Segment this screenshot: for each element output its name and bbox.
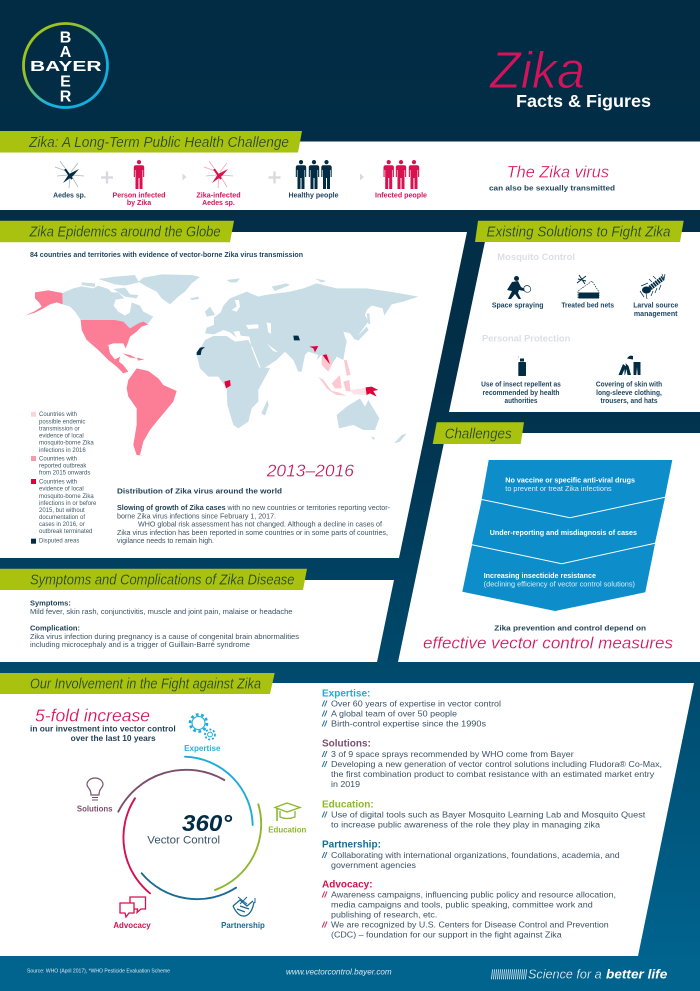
label: Aedes sp.: Aedes sp. <box>53 192 86 200</box>
challenge: insecticide resistance <box>462 544 655 611</box>
heading: challenges: Challenges <box>445 426 512 442</box>
label: person infected by Zika: by Zika <box>127 200 151 207</box>
title: Zika <box>488 42 585 100</box>
icon: Zika-infected mosquito <box>204 161 233 188</box>
label: insect repellent: recommended by health <box>482 390 560 397</box>
callout: 5-fold increase: 5-fold increase <box>35 706 150 726</box>
heading: symptoms <box>0 569 307 590</box>
chart: 360 degree ring <box>118 757 261 899</box>
logo: Bayer cross <box>24 24 108 108</box>
distribution text block: Zika virus infection has been reported in some countries or in some parts of countries, <box>117 528 388 537</box>
map legend: mosquito-borne Zika <box>39 440 94 446</box>
complication text: including microcephaly and is a trigger of Guillain-Barré syndrome <box>30 640 250 649</box>
list: advocacy: media campaigns and tools, public speaking, committee work and <box>331 899 593 909</box>
label: infected people: Infected people <box>375 192 427 200</box>
slogan stripes <box>492 969 526 979</box>
callout: 5-fold increase: over the last 10 years <box>71 734 156 743</box>
heading: public health challenge <box>0 131 302 152</box>
icon: treated bed nets <box>577 275 599 298</box>
callout: 5-fold increase: in our investment into vector control <box>30 724 176 733</box>
list: solutions: // <box>321 759 328 769</box>
label: larval source management: Larval source <box>633 303 678 310</box>
list: advocacy: publishing of research, etc. <box>331 909 437 919</box>
distribution text block: Slowing of growth of Zika cases with no new countries or territories reporting vector- <box>117 503 390 512</box>
map legend: Countries with <box>39 456 77 462</box>
conclusion: effective vector control measures <box>423 633 673 652</box>
heading: existing solutions: Existing Solutions to Fight Zika <box>486 224 670 240</box>
map legend: outbreak terminated <box>39 529 92 535</box>
map legend: evidence of local <box>39 434 84 440</box>
label: insect repellent <box>481 382 561 405</box>
map legend: transmission or <box>39 426 80 432</box>
symptoms text: Mild fever, skin rash, conjunctivitis, muscle and joint pain, malaise or headache <box>30 607 292 616</box>
icon: protective clothing <box>618 356 640 375</box>
list: education: to increase public awareness of the role they play in managing zika <box>331 820 600 830</box>
conclusion <box>423 623 673 652</box>
title: Facts & Figures <box>516 91 651 111</box>
heading: public health challenge: Zika: A Long-Term Public Health Challenge <box>28 135 289 151</box>
label: protective clothing: long-sleeve clothing, <box>596 390 662 397</box>
map legend: from 2015 onwards <box>39 470 90 476</box>
logo: Bayer cross: A <box>60 44 72 61</box>
label: person infected by Zika <box>112 192 166 207</box>
source note: Source: WHO (April 2017), *WHO Pesticide Evaluation Scheme <box>27 968 170 974</box>
map legend: documentation of <box>39 515 85 521</box>
map legend: infections in 2016 <box>39 448 86 454</box>
challenge: no vaccine <box>482 460 672 517</box>
list: expertise: Over 60 years of expertise in vector control <box>331 699 501 709</box>
list: solutions: // <box>321 749 328 759</box>
panel: our involvement <box>0 673 694 956</box>
icon: mortarboard <box>275 803 300 821</box>
list: solutions: the first combination product to combat resistance with an estimated market entry <box>331 769 655 779</box>
icon: larval source management <box>640 274 665 299</box>
list: solutions: in 2019 <box>331 779 360 789</box>
conclusion: Zika prevention and control depend on <box>494 623 646 632</box>
challenge: insecticide resistance: Increasing insecticide resistance <box>484 571 596 580</box>
distribution text block: Distribution of Zika virus around the world <box>117 486 282 495</box>
map legend: reported outbreak <box>39 463 87 469</box>
icon: handshake <box>233 897 255 916</box>
icon: gears <box>190 714 215 740</box>
panel: symptoms and complications <box>0 569 394 662</box>
list: partnership: Collaborating with international organizations, foundations, academia, and <box>331 850 620 860</box>
label: protective clothing <box>596 382 662 405</box>
challenge: insecticide resistance: (declining efficiency of vector control solutions) <box>484 579 635 588</box>
panel: challenges <box>398 422 700 662</box>
heading: involvement <box>0 673 275 694</box>
logo: Bayer cross: BAYER <box>30 58 102 75</box>
icon: light bulb <box>87 778 103 800</box>
challenge: under-reporting: Under-reporting and misdiagnosis of cases <box>490 528 637 537</box>
list: partnership: Partnership: <box>322 840 381 851</box>
icon: infected people <box>384 160 419 189</box>
label: insect repellent: authorities <box>504 398 538 405</box>
map legend: infections in or before <box>39 501 97 507</box>
list: education <box>321 799 646 830</box>
label: larval source management <box>633 303 678 318</box>
list: education: // <box>321 810 328 820</box>
challenge: no vaccine: No vaccine or specific anti-viral drugs <box>505 476 635 485</box>
distribution text block: borne Zika virus infections since February 1, 2017. <box>117 511 276 520</box>
icon: healthy people <box>296 160 332 189</box>
map legend: Countries with <box>39 412 77 418</box>
label: larval source management: management <box>634 311 678 318</box>
distribution text block: WHO global risk assessment has not changed. Although a decline in cases of <box>138 520 383 529</box>
label: protective clothing: trousers, and hats <box>600 398 658 405</box>
symptoms text <box>30 599 292 616</box>
callout: sexual transmission: can also be sexually transmitted <box>489 184 616 193</box>
list: expertise: A global team of over 50 people <box>331 709 457 719</box>
date range: 2013–2016 <box>266 461 354 481</box>
icon: Aedes mosquito <box>55 161 84 188</box>
map legend: 2015, but without <box>39 508 85 514</box>
label: advocacy: Advocacy <box>113 921 151 930</box>
label: space spraying: Space spraying <box>492 303 544 310</box>
label: Zika-infected Aedes sp.: Aedes sp. <box>202 200 235 207</box>
map legend: possible endemic <box>39 419 85 425</box>
panel: epidemics around the globe <box>0 221 467 558</box>
list: advocacy: // <box>321 889 328 899</box>
map legend: cases in 2016, or <box>39 522 85 528</box>
list: expertise: Expertise: <box>322 689 370 700</box>
callout: sexual transmission <box>489 164 616 193</box>
panel: existing solutions <box>449 221 700 412</box>
icon: space spraying <box>507 276 531 299</box>
list: advocacy: (CDC) – foundation for our support in the fight against Zika <box>331 930 562 940</box>
heading: involvement: Our Involvement in the Fight against Zika <box>30 676 261 692</box>
list: advocacy: We are recognized by U.S. Centers for Disease Control and Prevention <box>331 920 609 930</box>
label: insect repellent: Use of insect repellent as <box>481 382 561 389</box>
list: partnership: // <box>321 850 328 860</box>
complication text: Zika virus infection during pregnancy is a cause of congenital brain abnormalities <box>30 632 299 641</box>
label: education: Education <box>268 825 306 834</box>
footer <box>27 966 667 982</box>
heading: symptoms: Symptoms and Complications of Zika Disease <box>30 572 294 588</box>
website: www.vectorcontrol.bayer.com <box>286 966 392 976</box>
list: education: Education: <box>322 799 374 810</box>
icon: speech bubbles <box>120 897 146 917</box>
map legend: Disputed areas <box>39 539 79 545</box>
label: person infected by Zika: Person infected <box>112 192 166 200</box>
list: expertise: // <box>321 718 328 728</box>
label: expertise: Expertise <box>184 744 221 753</box>
map subtitle: 84 countries and territories with evidence of vector-borne Zika virus transmission <box>30 252 303 259</box>
logo: Bayer cross: B <box>60 30 71 46</box>
heading: challenges <box>433 422 524 444</box>
list: expertise: // <box>321 699 328 709</box>
subheading: mosquito control: Mosquito Control <box>497 252 575 262</box>
label: protective clothing: Covering of skin with <box>596 382 662 389</box>
logo: Bayer cross: E <box>60 74 71 90</box>
center label: 360 Vector Control <box>147 810 233 846</box>
center label: 360 Vector Control: 360° <box>182 810 233 836</box>
list: advocacy: // <box>321 920 328 930</box>
challenge: under-reporting <box>472 498 665 563</box>
world map <box>25 274 418 456</box>
complication text <box>30 623 299 649</box>
heading: epidemics: Zika Epidemics around the Globe <box>29 224 221 240</box>
icon: infected person <box>134 160 144 189</box>
label: Zika-infected Aedes sp.: Zika-infected <box>196 192 241 200</box>
label: healthy people: Healthy people <box>288 192 339 200</box>
center label: 360 Vector Control: Vector Control <box>147 834 220 846</box>
slogan: Science for a <box>528 968 602 982</box>
list: partnership <box>321 840 620 870</box>
list: partnership: government agencies <box>331 860 416 870</box>
icon: insect repellent <box>518 356 526 376</box>
icon: arrow <box>182 174 186 180</box>
label: solutions: Solutions <box>77 805 113 814</box>
label: Zika-infected Aedes sp. <box>196 192 241 207</box>
map legend: mosquito-borne Zika <box>39 494 94 500</box>
label: partnership: Partnership <box>221 921 265 930</box>
list: advocacy: Advocacy: <box>322 879 373 890</box>
subheading: personal protection: Personal Protection <box>482 333 570 343</box>
challenge: no vaccine: to prevent or treat Zika infections <box>505 484 612 493</box>
map legend: Countries with <box>39 480 77 486</box>
slogan: better life <box>606 968 667 982</box>
list: advocacy: Awareness campaigns, influencing public policy and resource allocation, <box>331 889 616 899</box>
list: expertise: // <box>321 709 328 719</box>
distribution text block <box>117 486 390 545</box>
map legend <box>31 412 97 545</box>
heading: epidemics <box>0 221 234 242</box>
list: education: Use of digital tools such as Bayer Mosquito Learning Lab and Mosquito Quest <box>331 810 646 820</box>
distribution text block: vigilance needs to remain high. <box>117 536 214 545</box>
title <box>488 42 651 111</box>
list: advocacy <box>321 879 616 940</box>
list: expertise <box>321 689 501 728</box>
complication text: Complication: <box>30 623 80 632</box>
callout: sexual transmission: The Zika virus <box>507 164 609 182</box>
list: solutions: 3 of 9 space sprays recommended by WHO come from Bayer <box>331 749 574 759</box>
list: solutions: Developing a new generation of vector control solutions including Fludora® Co-Max, <box>331 759 662 769</box>
label: treated bed nets: Treated bed nets <box>561 303 614 310</box>
list: expertise: Birth-control expertise since the 1990s <box>331 718 486 728</box>
slogan <box>528 968 667 982</box>
list: solutions: Solutions: <box>322 739 371 750</box>
panel: public health challenge <box>0 131 700 210</box>
symptoms text: Symptoms: <box>30 599 71 608</box>
icon: plus <box>268 172 280 184</box>
logo: Bayer cross: R <box>60 88 72 106</box>
icon: plus <box>101 172 113 184</box>
list: solutions <box>321 739 662 789</box>
map legend: evidence of local <box>39 487 84 493</box>
callout: 5-fold increase <box>30 706 176 743</box>
icon: arrow <box>360 174 364 180</box>
